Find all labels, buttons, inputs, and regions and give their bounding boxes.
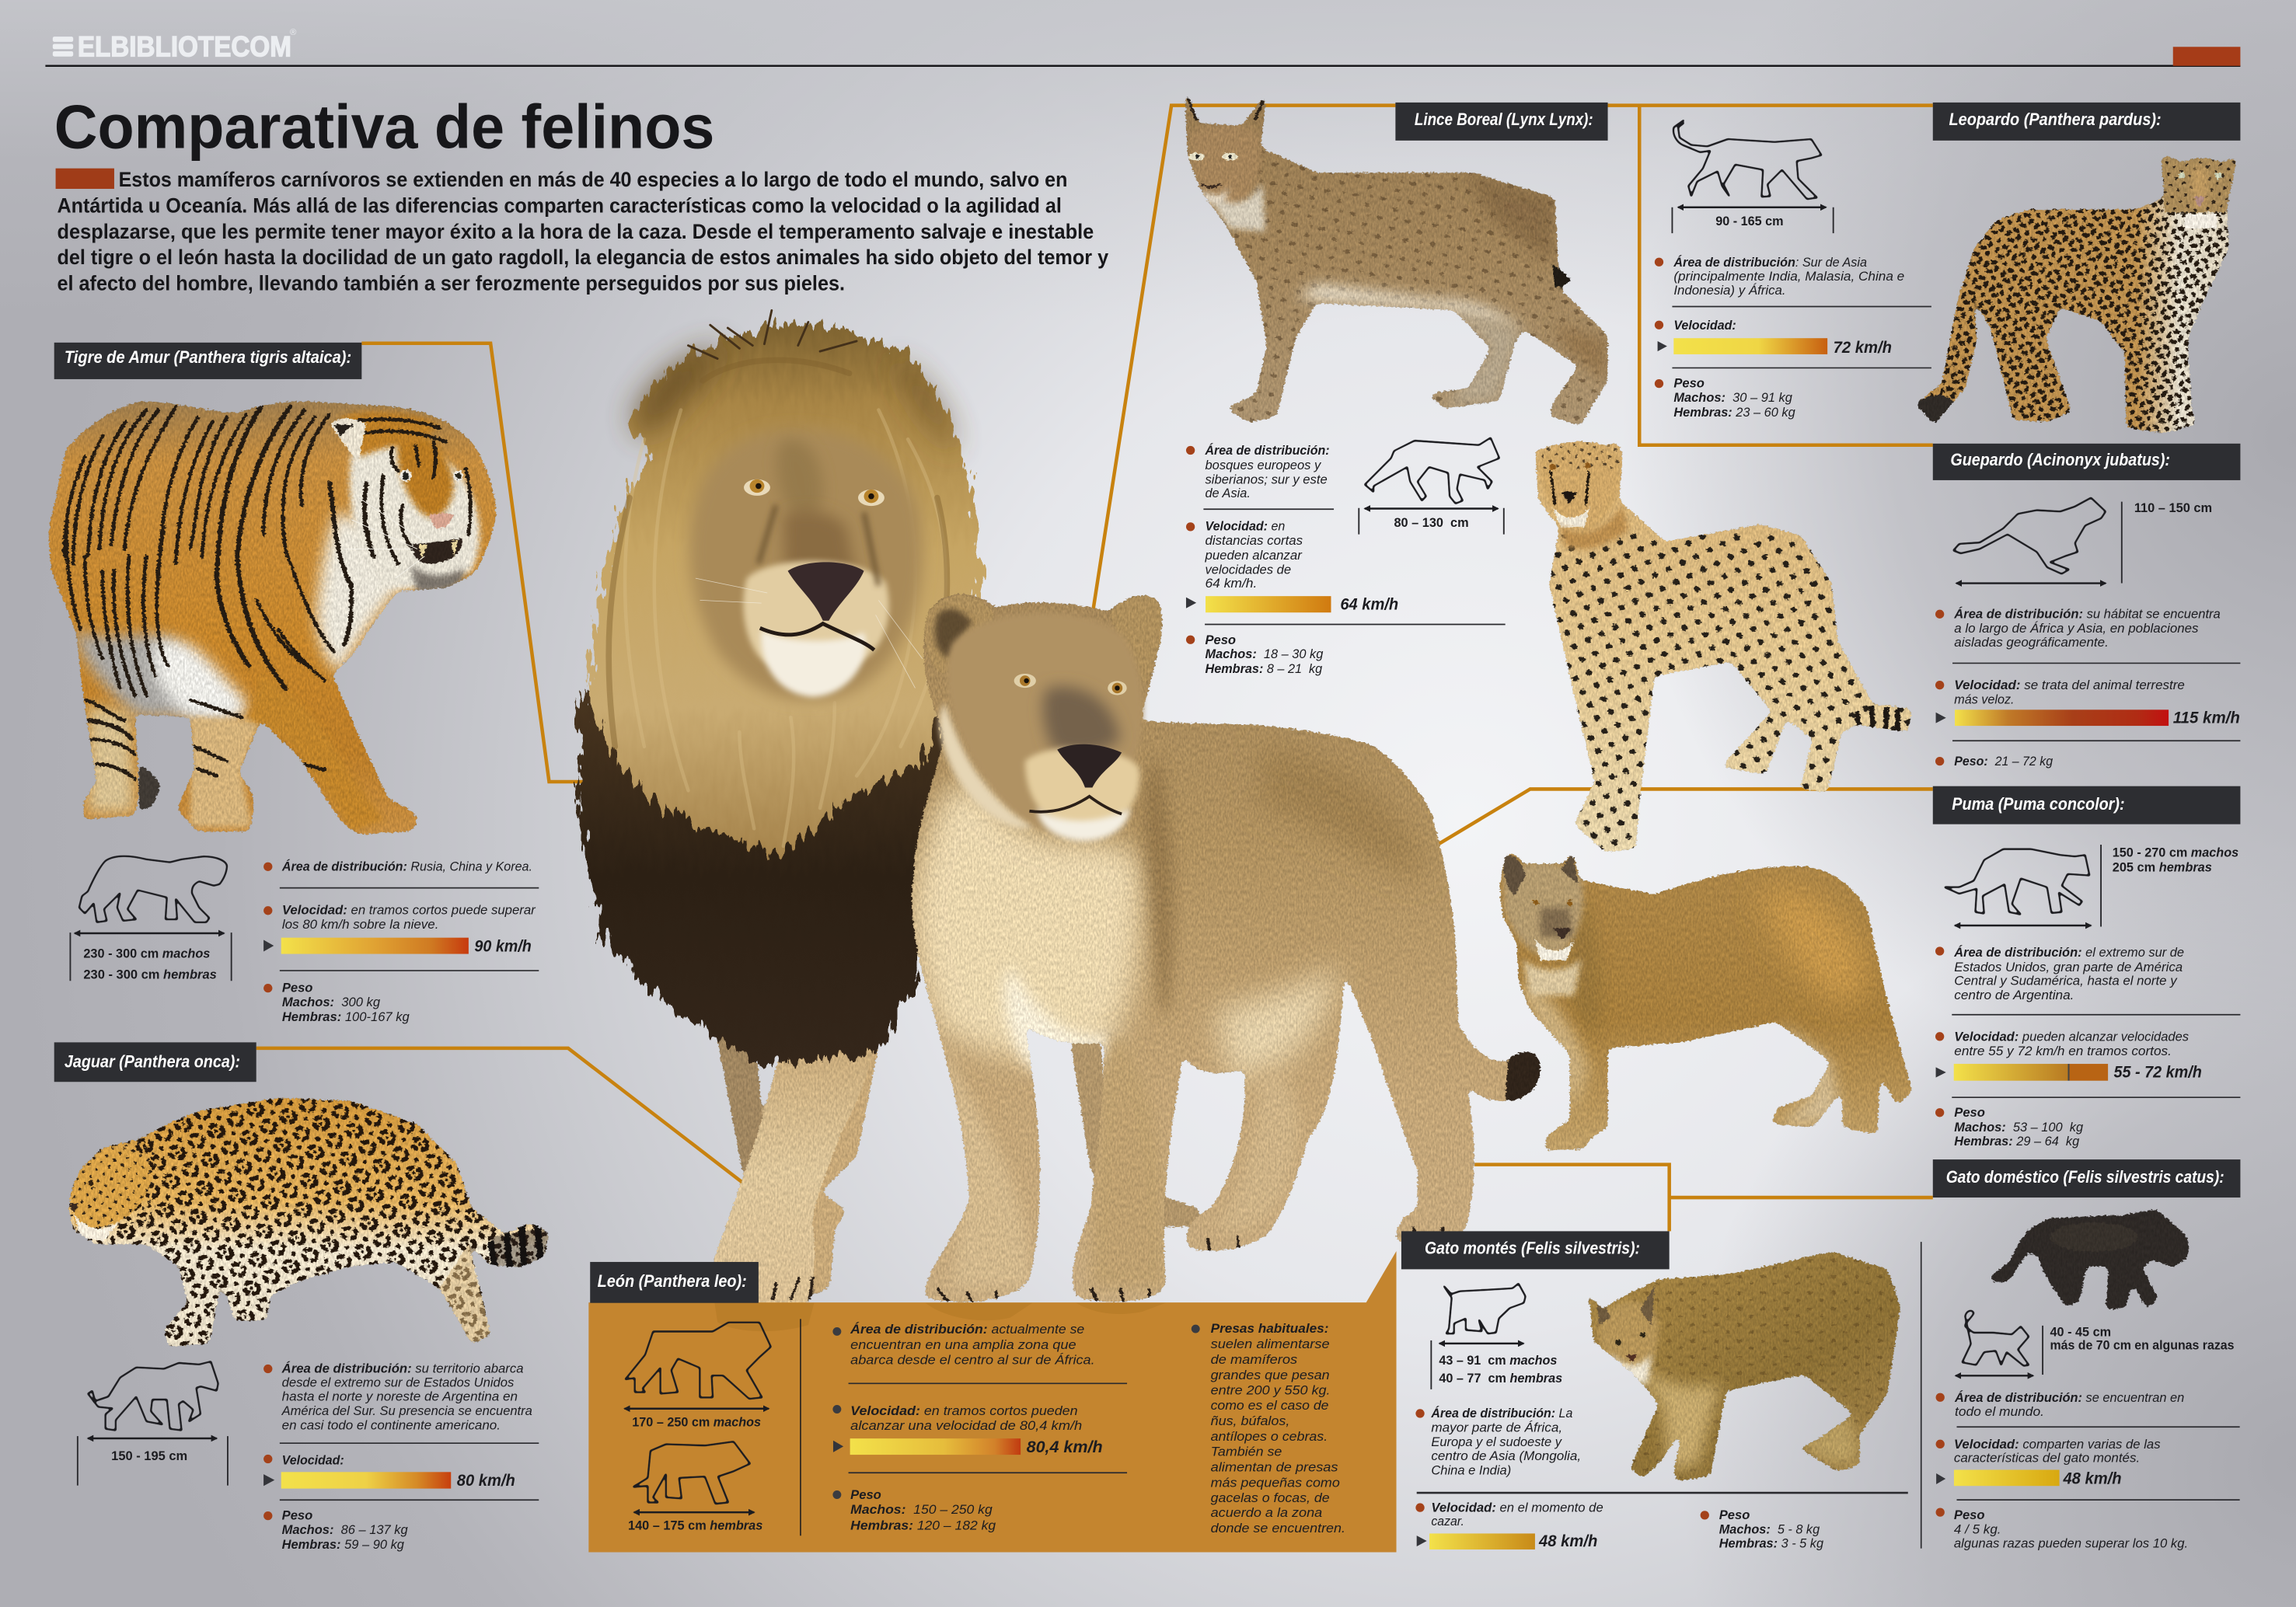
lion prey: entre 200 y 550 kg. [1211, 1382, 1331, 1397]
lynx facts: bosques europeos y [1205, 458, 1322, 472]
wildcat facts: China e India) [1431, 1463, 1511, 1478]
ghost paws under panel [714, 1303, 1166, 1331]
tiger facts: Hembras: 100-167 kg [282, 1009, 410, 1024]
animal: leopard [1917, 155, 2236, 434]
cheetah facts [1935, 607, 2240, 769]
panel: cheetah [1933, 444, 2240, 769]
intro text: del tigre o el león hasta la docilidad de un gato ragdoll, la elegancia de estos animales ha sido objeto del temor y [57, 246, 1108, 269]
lion facts: encuentran en una amplia zona que [850, 1337, 1076, 1352]
lion facts: 80,4 km/h [1027, 1438, 1103, 1456]
heading: cheetah: Guepardo (Acinonyx jubatus): [1950, 450, 2170, 469]
icon: lion silhouettes and sizes: 140 – 175 cm hembras [628, 1518, 762, 1533]
leopard facts: Machos: 30 – 91 kg [1673, 390, 1793, 405]
wildcat facts: mayor parte de África, [1431, 1420, 1562, 1434]
jaguar facts: hasta el norte y noreste de Argentina en [282, 1389, 518, 1404]
icon: domestic cat silhouette and size: 40 - 45 cm [2050, 1324, 2111, 1339]
leopard facts: (principalmente India, Malasia, China e [1673, 269, 1904, 284]
wildcat facts: Peso [1719, 1508, 1750, 1522]
lion prey: antílopes o cebras. [1211, 1429, 1328, 1444]
jaguar facts: Machos: 86 – 137 kg [282, 1522, 408, 1537]
heading: wildcat [1401, 1231, 1670, 1269]
lynx facts: siberianos; sur y este [1205, 472, 1328, 486]
icon: wildcat silhouette and size [1431, 1284, 1562, 1389]
puma facts: centro de Argentina. [1954, 988, 2074, 1002]
cheetah facts: Velocidad: se trata del animal terrestre [1954, 678, 2185, 692]
heading: domestic cat: Gato doméstico (Felis silvestris catus): [1946, 1167, 2224, 1187]
tiger facts: Peso [282, 981, 312, 995]
lion prey: más pequeñas como [1211, 1476, 1340, 1490]
lion prey: gacelas o focas, de [1211, 1490, 1330, 1505]
wildcat facts [1415, 1406, 1908, 1551]
heading: lion [590, 1262, 759, 1303]
icon: puma silhouette and size [1945, 845, 2238, 927]
wildcat facts: Europa y el sudoeste y [1431, 1434, 1563, 1449]
heading: lynx [1395, 103, 1608, 141]
puma facts: Central y Sudamérica, hasta el norte y [1954, 974, 2178, 988]
lion prey: suelen alimentarse [1211, 1337, 1330, 1351]
animal: cheetah [1530, 436, 1918, 864]
puma facts: entre 55 y 72 km/h en tramos cortos. [1954, 1044, 2172, 1058]
icon: domestic cat silhouette and size [1956, 1311, 2234, 1375]
lynx facts: Machos: 18 – 30 kg [1205, 647, 1324, 661]
puma facts: 55 - 72 km/h [2113, 1063, 2202, 1082]
icon: wildcat silhouette and size: 43 – 91 cm machos [1439, 1353, 1557, 1368]
icon: tiger silhouette and size [70, 856, 232, 981]
domestic cat facts [1936, 1390, 2240, 1551]
domestic cat facts: 48 km/h [2063, 1469, 2122, 1487]
wildcat facts: Hembras: 3 - 5 kg [1719, 1536, 1824, 1551]
heading: puma [1933, 786, 2240, 824]
tiger facts: 90 km/h [474, 937, 532, 956]
animal: bobcat [1588, 1252, 1901, 1481]
leopard facts: Área de distribución: Sur de Asia [1673, 255, 1867, 270]
heading: lynx: Lince Boreal (Lynx Lynx): [1415, 110, 1593, 129]
heading: cheetah [1933, 444, 2240, 480]
tiger facts: Área de distribución: Rusia, China y Korea. [281, 859, 532, 874]
intro text: Estos mamíferos carnívoros se extienden en más de 40 especies a lo largo de todo el mundo, salvo en [119, 168, 1067, 191]
jaguar facts: desde el extremo sur de Estados Unidos [282, 1375, 514, 1390]
lion facts [832, 1322, 1127, 1533]
panel: lion [588, 1251, 1397, 1553]
heading: puma: Puma (Puma concolor): [1952, 794, 2125, 814]
puma facts: Hembras: 29 – 64 kg [1954, 1134, 2080, 1149]
panel: wildcat [1401, 1231, 1908, 1551]
icon: cheetah silhouette and size: 110 – 150 cm [2134, 500, 2212, 515]
puma facts: Velocidad: pueden alcanzar velocidades [1954, 1029, 2189, 1044]
tiger facts: Velocidad: en tramos cortos puede superar [282, 903, 536, 918]
header accent tab [2173, 47, 2240, 66]
lion prey: grandes que pesan [1211, 1368, 1330, 1382]
panel: lynx [1186, 103, 1608, 676]
domestic cat facts: características del gato montés. [1954, 1451, 2140, 1466]
lynx facts: Peso [1205, 633, 1236, 647]
heading: jaguar [54, 1042, 256, 1082]
puma facts: Área de distribución: el extremo sur de [1953, 945, 2184, 960]
puma facts [1935, 945, 2240, 1149]
lion prey: Presas habituales: [1211, 1321, 1328, 1336]
heading: tiger: Tigre de Amur (Panthera tigris altaica): [65, 347, 351, 367]
lion panel background [588, 1251, 1397, 1553]
heading: domestic cat [1933, 1159, 2240, 1197]
jaguar facts: en casi todo el continente americano. [282, 1417, 501, 1432]
lion prey: de mamíferos [1211, 1352, 1297, 1367]
domestic cat facts: Velocidad: comparten varias de las [1954, 1437, 2161, 1452]
puma facts: Estados Unidos, gran parte de América [1954, 960, 2183, 974]
jaguar facts: Área de distribución: su territorio abarca [281, 1361, 524, 1376]
lynx facts: pueden alcanzar [1204, 548, 1303, 563]
connector lines [256, 106, 1933, 1231]
heading: leopard [1933, 103, 2240, 141]
intro text: Antártida u Oceanía. Más allá de las diferencias comparten características como la velocidad o la agilidad al [57, 194, 1062, 218]
lion facts: alcanzar una velocidad de 80,4 km/h [850, 1418, 1082, 1433]
cheetah facts: más veloz. [1954, 692, 2015, 707]
lioness head [924, 595, 1162, 841]
intro text: el afecto del hombre, llevando también a ser ferozmente perseguidos por sus pieles. [57, 272, 845, 295]
logo: ® [290, 28, 297, 37]
lion facts: abarca desde el centro al sur de África. [850, 1352, 1095, 1367]
lion prey [1192, 1321, 1345, 1536]
wildcat facts: Machos: 5 - 8 kg [1719, 1522, 1820, 1536]
icon: tiger silhouette and size: 230 - 300 cm machos [83, 946, 210, 961]
animal: puma [1494, 846, 1918, 1161]
domestic cat facts: Peso [1954, 1508, 1985, 1522]
wildcat facts: centro de Asia (Mongolia, [1431, 1448, 1581, 1463]
lynx facts: 64 km/h [1340, 594, 1398, 613]
cheetah facts: 115 km/h [2173, 709, 2240, 727]
animal: lynx [1179, 85, 1615, 434]
wildcat facts: Área de distribución: La [1430, 1406, 1572, 1421]
heading: leopard: Leopardo (Panthera pardus): [1949, 110, 2162, 129]
animal: lioness [908, 586, 1552, 1318]
lion prey: acuerdo a la zona [1211, 1505, 1322, 1520]
tiger facts: Machos: 300 kg [282, 995, 381, 1009]
lion facts: Peso [850, 1487, 881, 1502]
title: Comparativa de felinos [54, 92, 714, 161]
domestic cat facts: todo el mundo. [1955, 1404, 2044, 1419]
lion prey: como es el caso de [1211, 1398, 1328, 1413]
lynx facts: distancias cortas [1205, 533, 1303, 548]
animal: tiger [44, 396, 505, 842]
lynx facts: Hembras: 8 – 21 kg [1205, 661, 1323, 676]
domestic cat facts: Área de distribución: se encuentran en [1954, 1390, 2184, 1405]
heading: tiger [54, 343, 361, 379]
jaguar facts: América del Sur. Su presencia se encuentra [281, 1403, 532, 1418]
cheetah facts: Peso: 21 – 72 kg [1954, 754, 2053, 769]
leopard facts: 72 km/h [1834, 338, 1892, 357]
icon: lynx silhouette and size [1359, 437, 1504, 535]
header rule [45, 65, 2240, 67]
icon: puma silhouette and size: 150 - 270 cm machos [2113, 845, 2238, 860]
panel: puma [1933, 786, 2240, 1149]
cheetah facts: Área de distribución: su hábitat se encuentra [1953, 607, 2221, 622]
lion facts: Velocidad: en tramos cortos pueden [850, 1403, 1078, 1418]
tiger facts: los 80 km/h sobre la nieve. [282, 917, 438, 932]
icon: wildcat silhouette and size: 40 – 77 cm hembras [1439, 1371, 1562, 1386]
jaguar facts [263, 1361, 539, 1552]
heading: lion: León (Panthera leo): [598, 1271, 747, 1291]
leopard facts: Velocidad: [1673, 318, 1736, 333]
icon: lion silhouettes and sizes: 170 – 250 cm machos [632, 1415, 761, 1430]
wildcat facts: cazar. [1431, 1514, 1464, 1529]
domestic cat facts: algunas razas pueden superar los 10 kg. [1954, 1536, 2188, 1551]
jaguar facts: Hembras: 59 – 90 kg [282, 1537, 405, 1552]
panel: tiger [54, 343, 539, 1024]
lynx facts: Velocidad: en [1205, 519, 1285, 534]
logo: ELBIBLIOTECOM [78, 31, 291, 63]
heading: jaguar: Jaguar (Panthera onca): [65, 1051, 240, 1071]
puma facts: Peso [1954, 1105, 1985, 1120]
intro text [56, 168, 1108, 295]
lynx facts: Área de distribución: [1205, 443, 1330, 458]
lynx facts: 64 km/h. [1205, 576, 1257, 591]
icon: puma silhouette and size: 205 cm hembras [2113, 860, 2212, 875]
lion facts: Área de distribución: actualmente se [850, 1322, 1084, 1337]
jaguar facts: Peso [282, 1508, 312, 1523]
wildcat facts: Velocidad: en el momento de [1431, 1501, 1603, 1515]
icon: cheetah silhouette and size [1953, 498, 2212, 584]
intro text: desplazarse, que les permite tener mayor éxito a la hora de la caza. Desde el temperamento salvaje e inestable [57, 220, 1094, 243]
animal: male lion [577, 310, 982, 1305]
lynx facts [1186, 443, 1506, 676]
wildcat facts: 48 km/h [1538, 1532, 1597, 1550]
animal: domestic cat [1990, 1209, 2189, 1310]
heading: wildcat: Gato montés (Felis silvestris): [1425, 1239, 1640, 1258]
lynx facts: de Asia. [1205, 486, 1251, 500]
lion facts: Hembras: 120 – 182 kg [850, 1518, 996, 1533]
puma facts: Machos: 53 – 100 kg [1954, 1120, 2084, 1135]
lion prey: alimentan de presas [1211, 1459, 1338, 1474]
icon: jaguar silhouette and size [78, 1361, 228, 1486]
panel: leopard [1655, 103, 2240, 420]
icon: lion silhouettes and sizes [624, 1323, 771, 1533]
lion prey: También se [1211, 1444, 1282, 1459]
jaguar facts: 80 km/h [457, 1471, 515, 1490]
panel: jaguar [54, 1042, 539, 1552]
domestic cat facts: 4 / 5 kg. [1954, 1522, 2001, 1536]
lion prey: donde se encuentren. [1211, 1521, 1345, 1536]
panel: domestic cat [1933, 1159, 2240, 1551]
leopard facts: Indonesia) y África. [1673, 283, 1786, 298]
jaguar facts: Velocidad: [282, 1452, 344, 1467]
icon: jaguar silhouette and size: 150 - 195 cm [111, 1448, 187, 1463]
lion face [689, 429, 923, 700]
leopard facts [1655, 255, 1931, 420]
icon: lynx silhouette and size: 80 – 130 cm [1394, 515, 1469, 530]
lion facts: Machos: 150 – 250 kg [850, 1502, 993, 1517]
tiger facts [263, 859, 539, 1024]
leopard facts: Peso [1673, 375, 1705, 390]
cheetah facts: aisladas geográficamente. [1954, 635, 2109, 650]
cheetah facts: a lo largo de África y Asia, en poblaciones [1954, 621, 2199, 636]
leopard facts: Hembras: 23 – 60 kg [1673, 405, 1795, 420]
icon: leopard silhouette and size: 90 - 165 cm [1715, 214, 1784, 228]
icon: leopard silhouette and size [1672, 120, 1834, 233]
lynx facts: velocidades de [1205, 563, 1291, 577]
icon: domestic cat silhouette and size: más de 70 cm en algunas razas [2050, 1338, 2234, 1353]
icon: tiger silhouette and size: 230 - 300 cm hembras [83, 967, 217, 981]
lion prey: ñus, búfalos, [1211, 1414, 1289, 1428]
animal: jaguar [58, 1091, 557, 1354]
